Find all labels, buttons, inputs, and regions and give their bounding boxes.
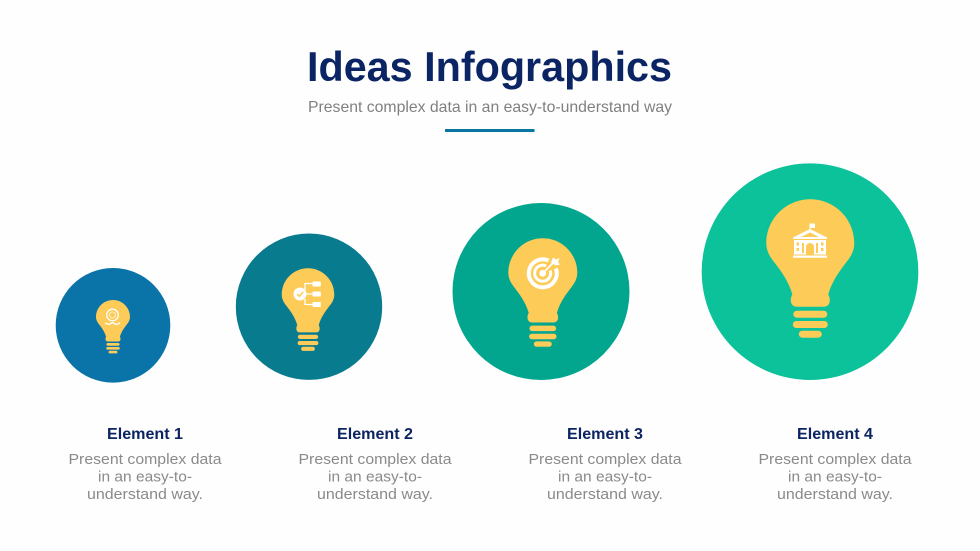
description: element 1: in an easy-to-: [98, 468, 192, 486]
heading: element 2: Element 2: [337, 426, 413, 443]
circle element 1: [56, 268, 170, 383]
text block: element 1: [68, 426, 222, 503]
description: element 2: [298, 451, 452, 503]
circle element 2: [236, 234, 382, 380]
circle background 3: [452, 203, 630, 380]
description: element 4: [758, 451, 912, 503]
icon: light bulb 1: [96, 300, 130, 353]
icon: building: [793, 224, 827, 258]
text block: element 2: [298, 426, 452, 503]
description: element 3: understand way.: [547, 486, 663, 503]
description: element 3: Present complex data: [528, 451, 682, 468]
description: element 4: Present complex data: [758, 451, 912, 468]
description: element 4: in an easy-to-: [788, 468, 882, 486]
icon: target: [529, 258, 560, 287]
circle element 4: [702, 163, 918, 380]
text block: element 4: [758, 426, 912, 503]
circle background 4: [702, 163, 918, 380]
description: element 2: understand way.: [317, 486, 433, 503]
circle element 3: [452, 203, 630, 380]
description: element 1: Present complex data: [68, 451, 222, 468]
description: element 2: Present complex data: [298, 451, 452, 468]
heading: element 1: Element 1: [107, 426, 183, 443]
description: element 4: understand way.: [777, 486, 893, 503]
heading: element 3: Element 3: [567, 426, 643, 443]
description: element 2: in an easy-to-: [328, 468, 422, 486]
title underline: [445, 129, 534, 132]
description: element 3: in an easy-to-: [558, 468, 652, 486]
description: element 1: understand way.: [87, 486, 203, 503]
subtitle: Present complex data in an easy-to-understand way: [308, 99, 672, 116]
circle background 2: [236, 234, 382, 380]
title: Ideas Infographics: [307, 43, 672, 90]
icon: award: [105, 309, 120, 324]
heading: element 4: Element 4: [797, 426, 873, 443]
circle background 1: [56, 268, 170, 383]
description: element 1: [68, 451, 222, 503]
icon: light bulb 2: [282, 268, 334, 351]
icon: light bulb 4: [766, 199, 854, 338]
icon: process flow: [294, 282, 321, 307]
description: element 3: [528, 451, 682, 503]
icon: light bulb 3: [508, 238, 577, 347]
text block: element 3: [528, 426, 682, 503]
